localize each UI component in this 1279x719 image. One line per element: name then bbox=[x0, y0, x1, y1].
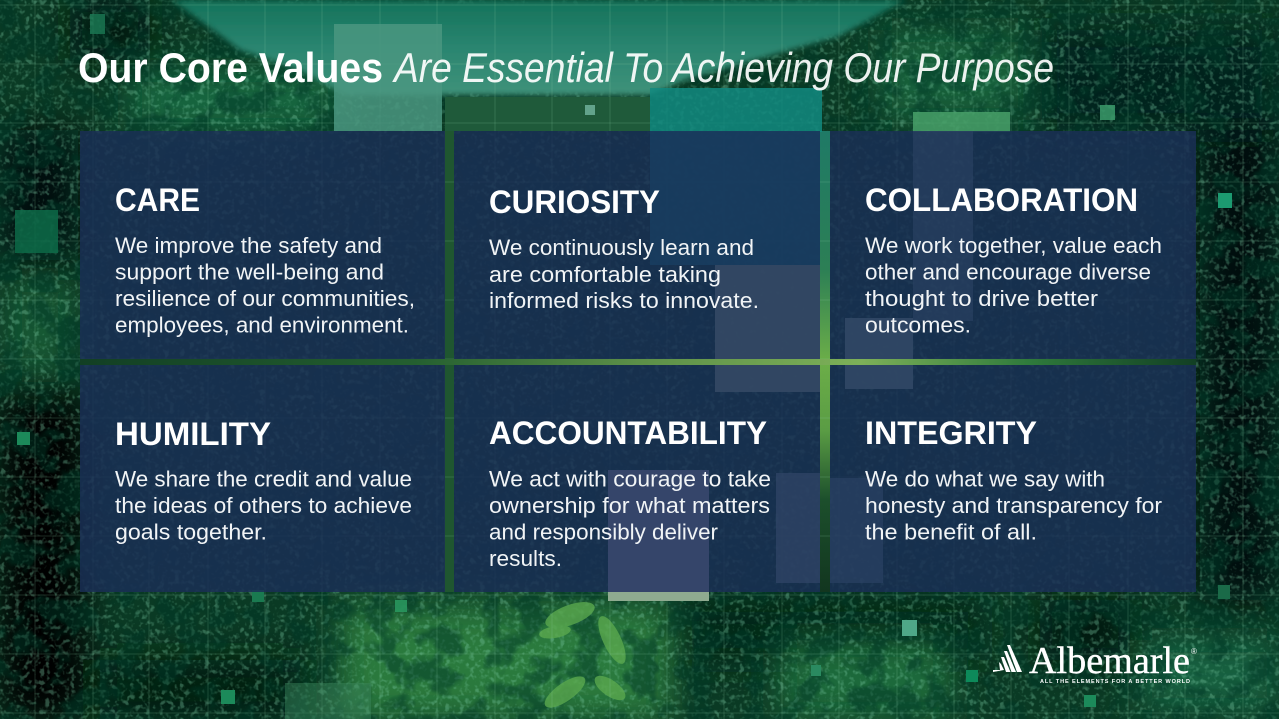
text: integrity description bbox=[865, 466, 1162, 544]
panel: collaboration bbox=[830, 131, 1196, 359]
text: collaboration description: outcomes. bbox=[865, 312, 971, 338]
text: humility description bbox=[115, 466, 412, 544]
text: curiosity description: We continuously learn and bbox=[489, 235, 754, 260]
text: integrity description: We do what we say with bbox=[865, 466, 1105, 492]
heading: humility: HUMILITY bbox=[115, 416, 271, 452]
panel: integrity bbox=[830, 365, 1196, 592]
text: care description bbox=[115, 233, 415, 338]
panel: humility bbox=[80, 365, 445, 592]
text: accountability description: ownership for what matters bbox=[489, 493, 770, 518]
text: curiosity description bbox=[489, 235, 759, 313]
text: collaboration description: thought to drive better bbox=[865, 286, 1098, 311]
clearing between panels bbox=[444, 131, 454, 592]
text: curiosity description: informed risks to innovate. bbox=[489, 288, 759, 313]
title: Are Essential To Achieving Our Purpose bbox=[391, 44, 1054, 91]
sky bbox=[172, 0, 905, 95]
text: accountability description: We act with courage to take bbox=[489, 466, 771, 492]
text: humility description: We share the credit and value bbox=[115, 466, 412, 492]
title bbox=[78, 44, 1054, 91]
text: accountability description: results. bbox=[489, 546, 562, 571]
text: integrity description: honesty and transparency for bbox=[865, 493, 1162, 518]
text: collaboration description: We work together, value each bbox=[865, 233, 1162, 258]
heading: care: CARE bbox=[115, 182, 200, 218]
heading: accountability: ACCOUNTABILITY bbox=[489, 415, 767, 451]
text: accountability description: and responsibly deliver bbox=[489, 520, 718, 544]
heading: integrity: INTEGRITY bbox=[865, 415, 1037, 451]
text: care description: We improve the safety and bbox=[115, 233, 382, 258]
text: curiosity description: are comfortable taking bbox=[489, 262, 721, 287]
heading: collaboration: COLLABORATION bbox=[865, 182, 1138, 218]
text: humility description: the ideas of others to achieve bbox=[115, 493, 412, 518]
horizontal clearing between panel rows bbox=[80, 359, 1196, 365]
registered mark: ® bbox=[1191, 647, 1197, 656]
text: humility description: goals together. bbox=[115, 520, 267, 544]
text: integrity description: the benefit of all. bbox=[865, 520, 1037, 544]
wordmark: Albemarle bbox=[1029, 640, 1190, 682]
panel: care bbox=[80, 131, 445, 359]
text: care description: resilience of our communities, bbox=[115, 286, 415, 311]
tagline: ALL THE ELEMENTS FOR A BETTER WORLD bbox=[1040, 679, 1190, 685]
logo: Albemarle bbox=[993, 640, 1197, 685]
text: care description: employees, and environment. bbox=[115, 312, 409, 338]
title: Our Core Values bbox=[78, 44, 383, 91]
small leaf plant bbox=[538, 597, 631, 713]
text: collaboration description bbox=[865, 233, 1162, 338]
heading: curiosity: CURIOSITY bbox=[489, 184, 660, 220]
panel: curiosity bbox=[454, 131, 820, 359]
tree line bbox=[445, 97, 650, 131]
icon: Albemarle mark bbox=[993, 645, 1022, 672]
text: collaboration description: other and encourage diverse bbox=[865, 260, 1151, 284]
panel: accountability bbox=[454, 365, 820, 592]
text: accountability description bbox=[489, 466, 771, 571]
text: care description: support the well-being and bbox=[115, 260, 384, 284]
